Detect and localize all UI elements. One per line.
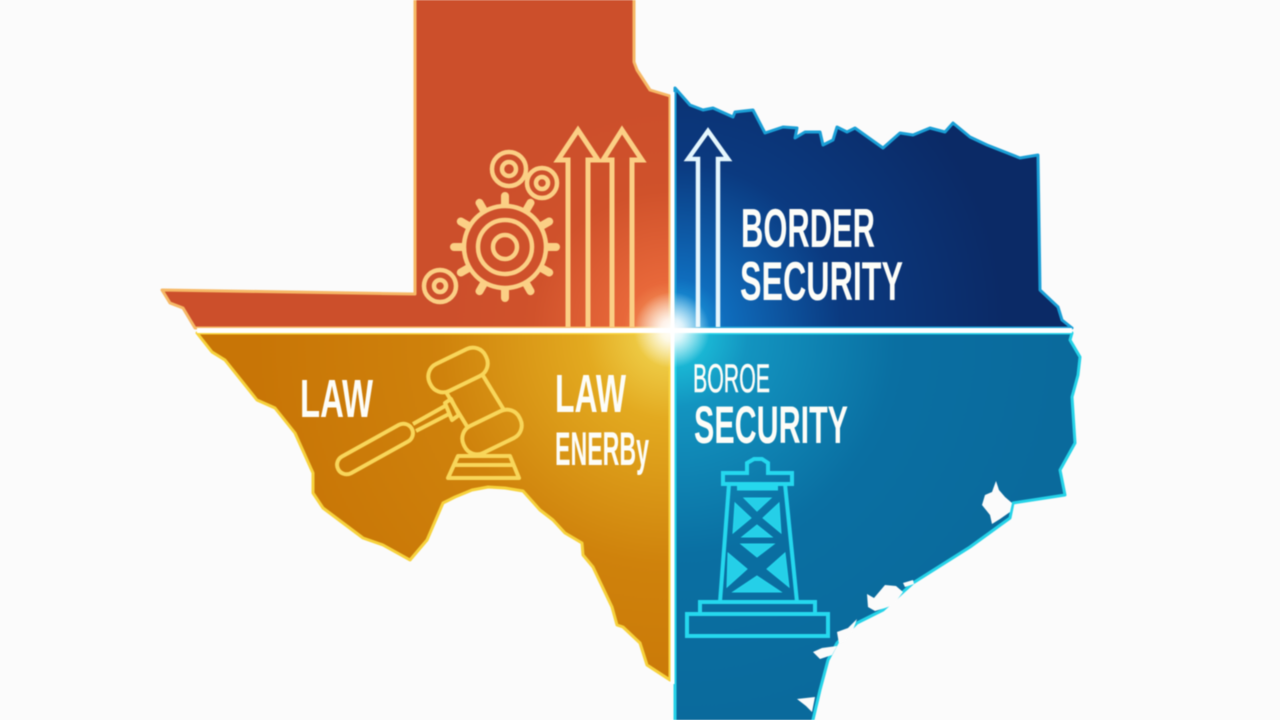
label: security: SECURITY: [694, 396, 848, 455]
label: garbled border: BOROE: [693, 357, 770, 401]
panel: orange northwest quadrant: [162, 0, 670, 328]
icon: two growth arrows: [558, 130, 642, 327]
icon: oil derrick: [687, 459, 828, 636]
icon: bays and barrier islands: [797, 481, 1012, 712]
panel: gold southwest quadrant: [197, 333, 670, 680]
heading: border security: BORDER: [741, 197, 875, 259]
icon: gears: [424, 152, 557, 302]
panel: gold southwest quadrant: ENERBy: [555, 422, 649, 475]
label: law right: LAW: [555, 364, 626, 424]
heading: border security: [740, 197, 903, 312]
label: law left: LAW: [300, 369, 373, 429]
panel: navy northeast quadrant: [675, 88, 1072, 328]
divider: white cross with glowing centre: [197, 92, 1072, 684]
icon: gavel: [334, 343, 526, 478]
panel: teal southeast quadrant: [675, 333, 1080, 720]
heading: border security: SECURITY: [740, 250, 903, 312]
icon: upward arrow: [688, 131, 728, 327]
